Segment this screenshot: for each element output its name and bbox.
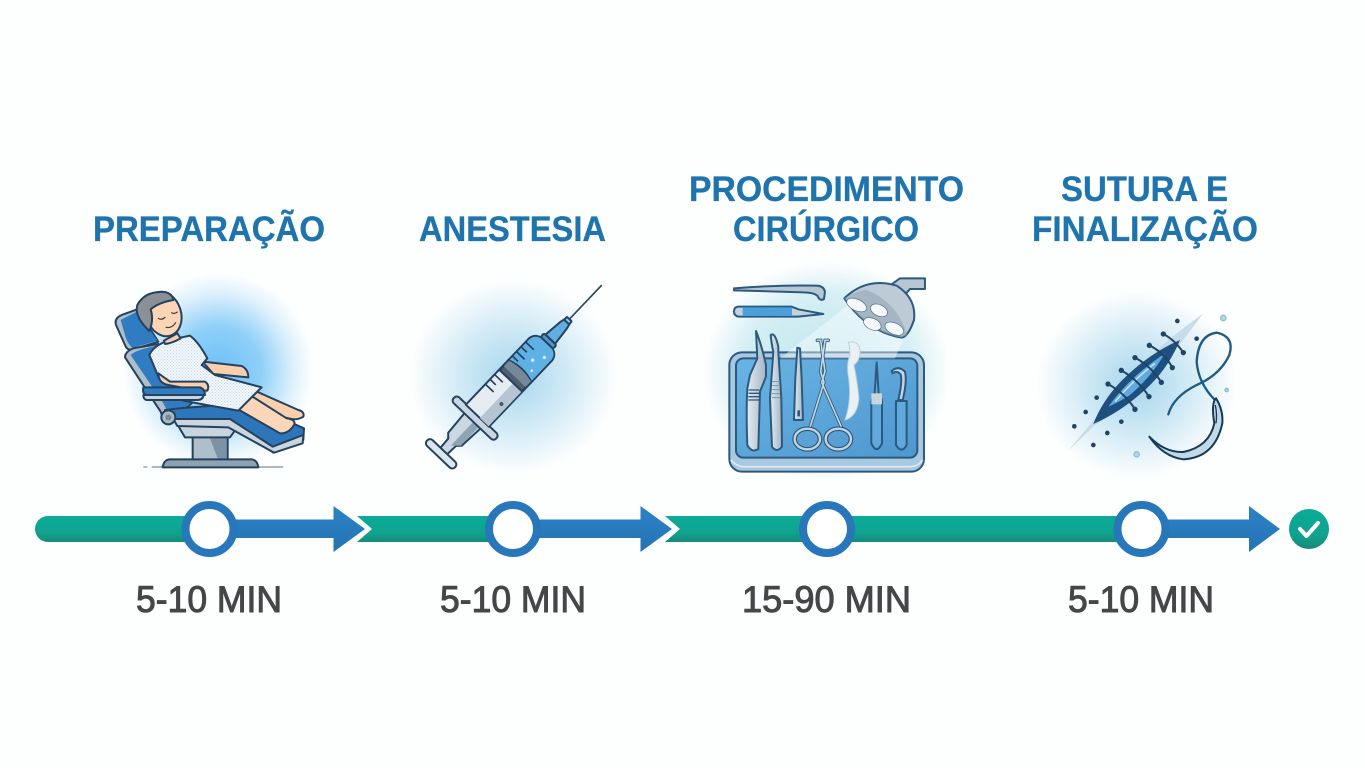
- icon: syringe: [410, 265, 623, 477]
- icon: surgical tray, instruments and lamp: [703, 262, 950, 482]
- heading: procedimento cirúrgico: [689, 170, 964, 249]
- panel: step 4 sutura e finalização: [1032, 170, 1258, 478]
- arrow: step 2: [530, 506, 672, 552]
- arrow: step 4: [1155, 506, 1280, 552]
- duration: step 4: 5-10 MIN: [1068, 579, 1214, 620]
- node: step 1: [186, 505, 234, 553]
- duration: step 2: 5-10 MIN: [440, 579, 586, 620]
- node: step 2: [489, 505, 537, 553]
- icon: sutured incision with needle and thread: [1037, 292, 1237, 478]
- heading: sutura e finalização: FINALIZAÇÃO: [1032, 210, 1258, 249]
- heading: anestesia: ANESTESIA: [419, 210, 606, 249]
- timeline: green track: [35, 516, 1135, 542]
- node: step 4: [1118, 505, 1166, 553]
- duration: step 1: 5-10 MIN: [136, 579, 282, 620]
- icon: patient in reclined chair: [116, 273, 313, 467]
- heading: sutura e finalização: SUTURA E: [1061, 170, 1228, 209]
- timeline: [35, 505, 1329, 553]
- heading: sutura e finalização: [1032, 170, 1258, 249]
- heading: procedimento cirúrgico: CIRÚRGICO: [733, 209, 919, 249]
- icon: completion check: [1289, 509, 1329, 549]
- node: step 3: [803, 505, 851, 553]
- panel: step 1 preparação: [93, 210, 325, 467]
- panel: step 2 anestesia: [410, 210, 623, 477]
- duration: step 3: 15-90 MIN: [742, 579, 911, 620]
- panel: step 3 procedimento cirúrgico: [689, 170, 964, 482]
- heading: preparação: PREPARAÇÃO: [93, 210, 325, 249]
- arrow: step 1: [225, 506, 365, 552]
- heading: procedimento cirúrgico: PROCEDIMENTO: [689, 170, 964, 209]
